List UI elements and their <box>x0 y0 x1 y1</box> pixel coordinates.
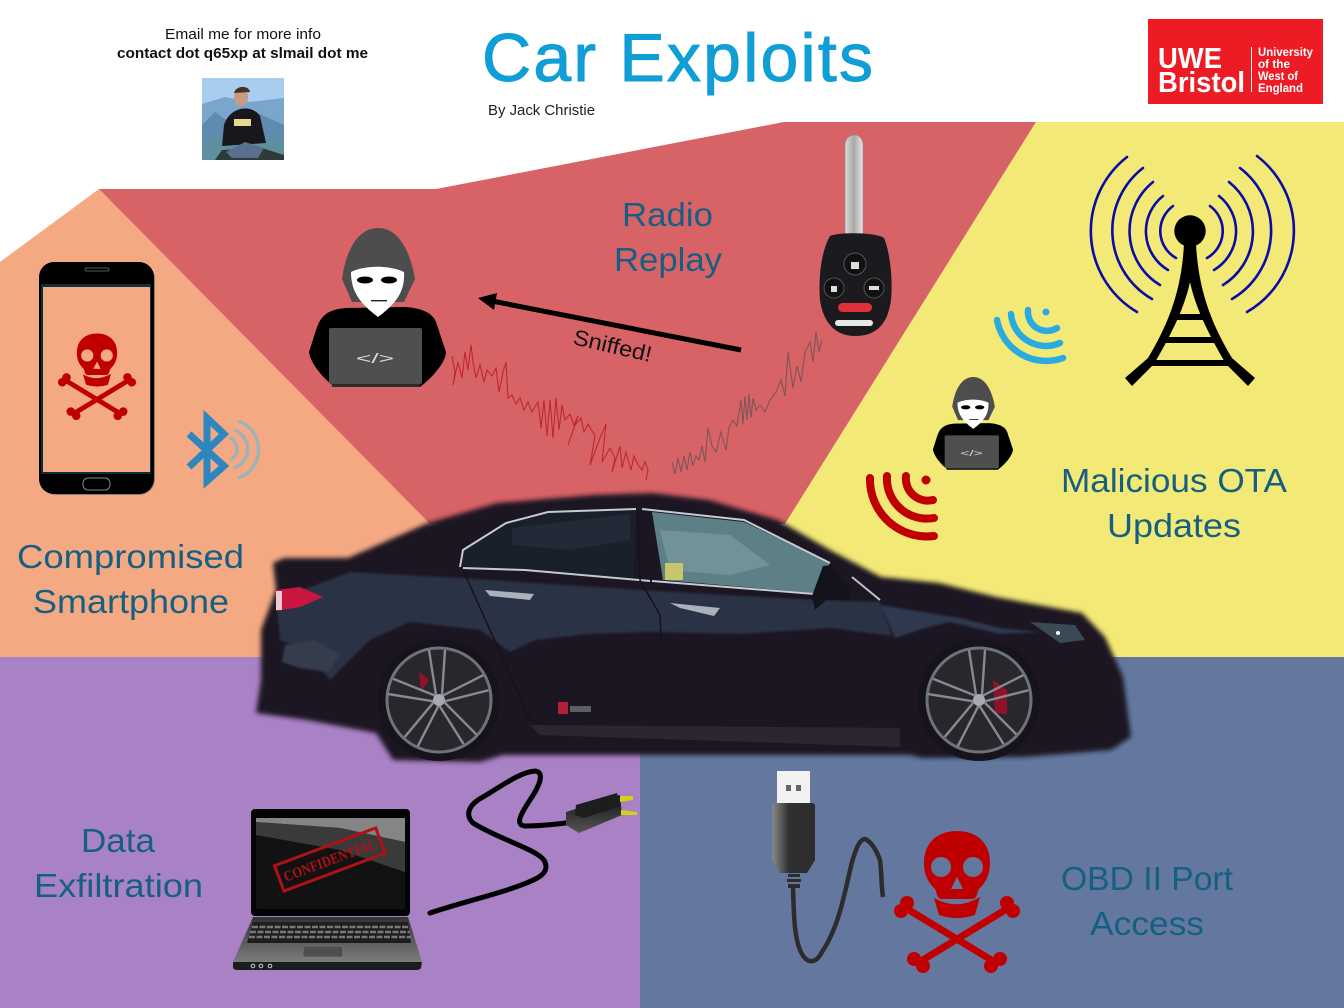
logo: UWE Bristol: West of <box>1258 69 1299 83</box>
heading: radio replay <box>614 196 723 278</box>
contact text <box>117 26 368 62</box>
heading: data exfiltration <box>34 822 203 904</box>
icon: radio tower <box>1091 156 1294 386</box>
car headlight <box>1030 622 1085 643</box>
heading: compromised smartphone: Smartphone <box>33 583 229 620</box>
icon: USB cable <box>772 771 883 961</box>
panel: OBD II port access background <box>640 657 1344 1008</box>
logo: UWE Bristol: Bristol <box>1158 67 1245 99</box>
car mirror <box>812 565 850 610</box>
heading: OBD II port access: Access <box>1090 905 1204 942</box>
car badge <box>558 702 591 714</box>
icon: key fob <box>819 135 892 336</box>
heading: radio replay: Radio <box>622 196 713 233</box>
car taillight <box>276 587 323 611</box>
panel: compromised smartphone background <box>0 189 430 657</box>
icon: smartphone <box>39 262 155 495</box>
car sill <box>530 725 900 747</box>
heading: compromised smartphone <box>17 538 244 620</box>
icon: hacker with laptop (large): </> <box>356 350 394 366</box>
heading: malicious OTA updates: Updates <box>1107 507 1241 544</box>
panel: malicious OTA updates background <box>785 122 1344 657</box>
author photo <box>202 78 284 160</box>
car rear side window <box>460 509 636 578</box>
confidential stamp: CONFIDENTIAL <box>282 836 379 886</box>
title: Car Exploits <box>482 20 873 96</box>
icon: skull and crossbones on phone <box>58 333 136 420</box>
icon: power cable and plug <box>430 771 637 913</box>
logo: UWE Bristol: UWE <box>1158 43 1222 75</box>
radio waveform: captured signal <box>452 345 648 480</box>
contact text: Email me for more info <box>165 26 321 43</box>
icon: hacker with laptop (small): </> <box>960 449 983 458</box>
heading: radio replay: Replay <box>614 241 723 278</box>
heading: compromised smartphone: Compromised <box>17 538 244 575</box>
icon: hacker with laptop (large) <box>309 228 446 387</box>
icon: laptop with confidential stamp <box>233 809 422 970</box>
icon: red wireless signal <box>870 476 934 536</box>
icon: car <box>256 493 1131 762</box>
heading: data exfiltration: Data <box>81 822 156 859</box>
arrow: sniffed signal <box>478 293 741 350</box>
logo: UWE Bristol: of the <box>1258 57 1290 71</box>
heading: malicious OTA updates <box>1061 462 1287 544</box>
icon: bluetooth <box>189 418 259 481</box>
heading: data exfiltration: Exfiltration <box>34 867 203 904</box>
heading: OBD II port access: OBD II Port <box>1061 860 1233 897</box>
radio waveform: key fob signal <box>672 332 822 474</box>
icon: blue wireless signal <box>997 308 1063 361</box>
author byline: By Jack Christie <box>488 102 595 119</box>
heading: malicious OTA updates: Malicious OTA <box>1061 462 1287 499</box>
label: sniffed: Sniffed! <box>571 325 654 367</box>
car front wheel <box>918 639 1040 761</box>
logo: UWE Bristol: England <box>1258 81 1303 95</box>
icon: skull and crossbones <box>894 831 1020 973</box>
logo: UWE Bristol: University <box>1258 45 1313 59</box>
car front side window <box>652 512 830 593</box>
car door lines and handles <box>463 510 900 730</box>
panel: radio replay background <box>99 122 1036 524</box>
contact text: contact dot q65xp at slmail dot me <box>117 45 368 62</box>
car rear wheel <box>378 639 500 761</box>
logo: UWE Bristol <box>1148 19 1323 104</box>
heading: OBD II port access <box>1061 860 1233 942</box>
icon: hacker with laptop (small) <box>933 377 1013 470</box>
panel: data exfiltration background <box>0 657 640 1008</box>
